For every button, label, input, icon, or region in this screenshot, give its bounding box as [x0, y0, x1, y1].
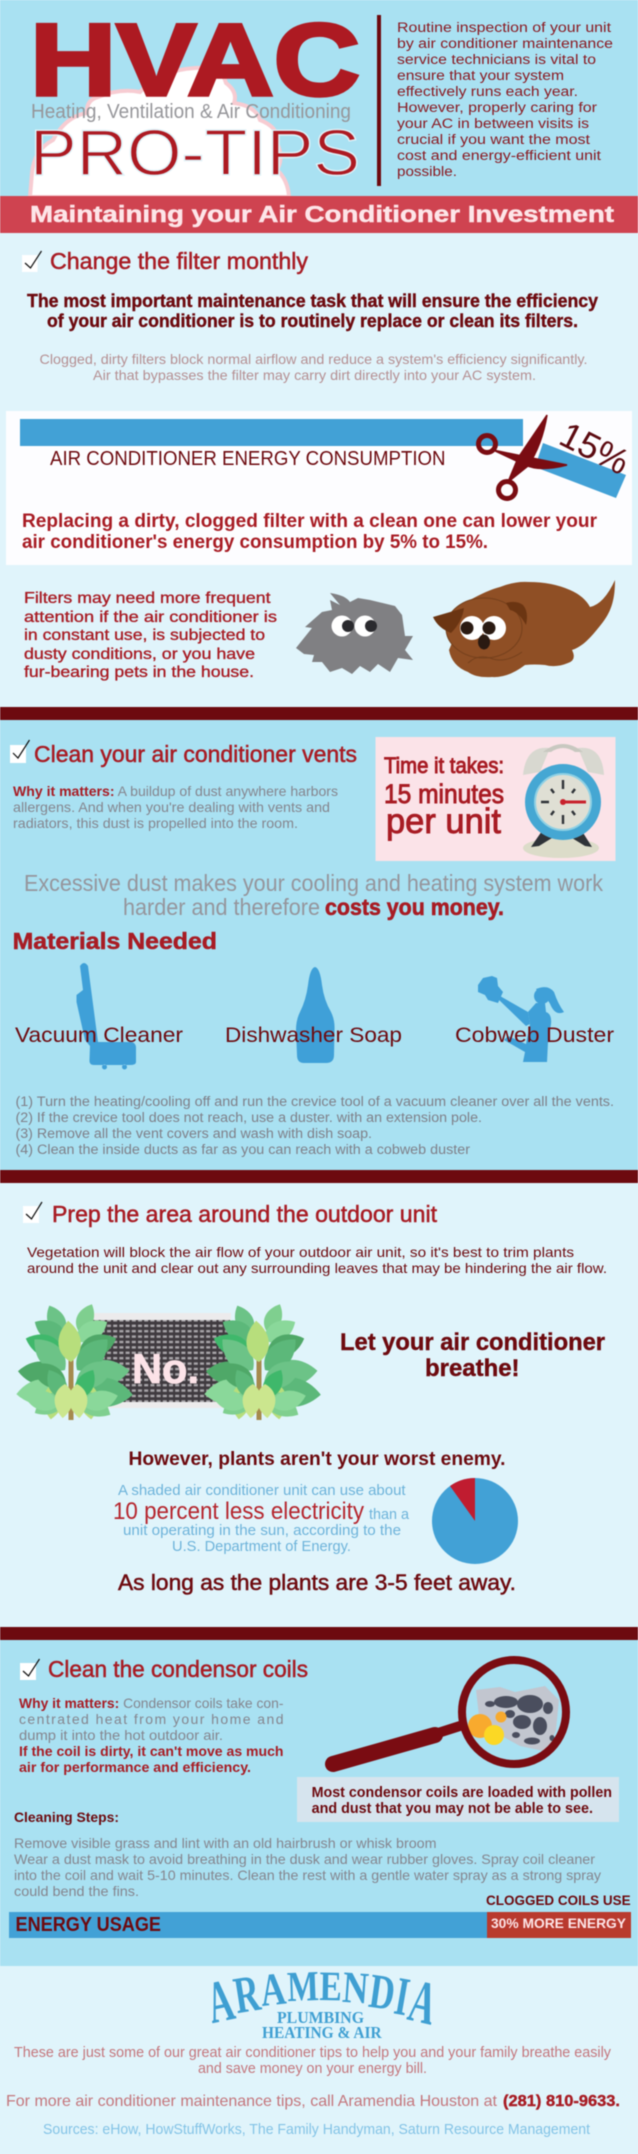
heading: Clean your air conditioner vents — [34, 741, 357, 767]
shade statistic: than a — [369, 1506, 410, 1523]
why it matters: air for performance and efficiency. — [19, 1759, 251, 1775]
energy usage bar — [9, 1912, 631, 1938]
closing text — [14, 2045, 612, 2077]
why it matters: Why it matters: Condensor coils take con- — [19, 1695, 284, 1711]
pollen callout: and dust that you may not be able to see. — [312, 1801, 593, 1817]
pets text: attention if the air conditioner is — [24, 609, 277, 626]
divider bar — [377, 15, 381, 186]
icon: vacuum cleaner — [76, 963, 136, 1070]
logo: Aramendia: I — [390, 1966, 414, 2027]
energy usage bar: ENERGY USAGE — [16, 1914, 161, 1936]
logo: Aramendia: HEATING & AIR — [262, 2023, 382, 2042]
intro paragraph — [397, 20, 613, 179]
intro paragraph: cost and energy-efficient unit — [397, 148, 601, 163]
vegetation text: Vegetation will block the air flow of your outdoor air unit, so it's best to trim plants — [27, 1244, 574, 1260]
pollen callout — [297, 1777, 619, 1822]
logo: Aramendia: A — [258, 1963, 288, 2016]
why it matters: If the coil is dirty, it can't move as much — [19, 1743, 284, 1759]
enemy heading: However, plants aren't your worst enemy. — [128, 1449, 505, 1470]
pollen callout: Most condensor coils are loaded with pollen — [312, 1785, 612, 1801]
sources: Sources: eHow, HowStuffWorks, The Family Handyman, Saturn Resource Management — [43, 2121, 591, 2138]
header — [30, 3, 613, 197]
subtitle: Heating, Ventilation & Air Conditioning — [31, 101, 351, 123]
dust message: Excessive dust makes your cooling and heating system work — [24, 870, 603, 896]
why it matters: allergens. And when you're dealing with vents and — [13, 799, 330, 815]
steps list — [16, 1094, 614, 1157]
call to action: (281) 810-9633. — [503, 2093, 620, 2110]
icon: checkbox — [23, 1202, 42, 1223]
logo: Aramendia: A — [201, 1965, 240, 2036]
material labels: Dishwasher Soap — [225, 1024, 402, 1047]
vegetation text: around the unit and clear out any surrounding leaves that may be hindering the air flow. — [27, 1260, 607, 1276]
plants distance: As long as the plants are 3-5 feet away. — [118, 1570, 516, 1595]
panel: outdoor unit — [15, 1201, 607, 1595]
cleaning steps heading: Cleaning Steps: — [14, 1809, 119, 1825]
logo: Aramendia: R — [230, 1964, 265, 2025]
banner: Maintaining your Air Conditioner Investment — [30, 201, 614, 227]
panel: change the filter — [6, 248, 636, 681]
materials heading: Materials Needed — [13, 928, 217, 954]
material labels: Cobweb Duster — [455, 1024, 614, 1047]
logo: Aramendia: N — [341, 1962, 370, 2014]
icon: checkbox — [10, 740, 30, 763]
panel: time it takes: per unit — [386, 802, 501, 841]
intro paragraph: effectively runs each year. — [397, 84, 578, 99]
intro paragraph: possible. — [397, 164, 457, 179]
cleaning steps text: Wear a dust mask to avoid breathing in the dusk and wear rubber gloves. Spray coil cleaner — [14, 1851, 595, 1867]
material labels — [15, 1024, 614, 1047]
intro paragraph: ensure that your system — [397, 68, 564, 83]
pets text: in constant use, is subjected to — [24, 627, 265, 644]
cleaning steps text: Remove visible grass and lint with an old hairbrush or whisk broom — [14, 1835, 436, 1851]
icon: soap bottle — [296, 967, 335, 1063]
panel: time it takes: Time it takes: — [384, 753, 504, 778]
energy label: CLOGGED COILS USE — [486, 1892, 631, 1908]
shade statistic: U.S. Department of Energy. — [172, 1538, 351, 1555]
panel: time it takes: 15 minutes — [384, 779, 504, 809]
steps list: (2) If the crevice tool does not reach, use a duster. with an extension pole. — [16, 1110, 482, 1125]
logo: Aramendia: PLUMBING — [277, 2008, 364, 2027]
heading: Prep the area around the outdoor unit — [52, 1201, 438, 1227]
why it matters — [13, 783, 338, 831]
breathe message: breathe! — [425, 1355, 520, 1382]
shade statistic — [113, 1482, 410, 1555]
pie chart — [432, 1478, 518, 1564]
icon: magnifying glass — [333, 1660, 566, 1764]
shade statistic: 10 percent less electricity — [113, 1498, 364, 1525]
bar cut piece — [535, 443, 626, 498]
logo: Aramendia: E — [319, 1964, 342, 2010]
icon: duster woman — [478, 976, 564, 1062]
footer — [6, 1962, 620, 2138]
panel: clean vents — [10, 737, 616, 1157]
why it matters — [19, 1695, 284, 1775]
panel: time it takes — [376, 737, 616, 861]
pets text — [24, 590, 277, 681]
logo: Aramendia: D — [366, 1964, 398, 2021]
explanatory text: Clogged, dirty filters block normal airflow and reduce a system's efficiency significantly. — [40, 351, 588, 367]
call to action: For more air conditioner maintenance tips, call Aramendia Houston at — [6, 2093, 498, 2110]
steps list: (3) Remove all the vent covers and wash with dish soap. — [16, 1126, 372, 1141]
steps list: (4) Clean the inside ducts as far as you can reach with a cobweb duster — [16, 1142, 471, 1157]
bar label: AIR CONDITIONER ENERGY CONSUMPTION — [50, 448, 446, 470]
panel: energy consumption — [6, 411, 636, 565]
logo: Aramendia: A — [403, 1967, 443, 2038]
icon: scissors — [478, 415, 567, 498]
illustration: plants blocking unit: No. — [132, 1345, 199, 1392]
shade statistic: unit operating in the sun, according to the — [123, 1522, 401, 1539]
bar — [20, 419, 523, 446]
cleaning steps text: into the coil and wait 5-10 minutes. Clean the rest with a gentle water spray as a strong spray — [14, 1867, 601, 1883]
intro paragraph: crucial if you want the most — [397, 132, 590, 147]
key message: The most important maintenance task that will ensure the efficiency — [27, 291, 598, 311]
intro paragraph: However, properly caring for — [397, 100, 598, 115]
why it matters: centrated heat from your home and — [19, 1711, 284, 1727]
dust message: harder and therefore — [123, 894, 320, 920]
why it matters: dump it into the hot outdoor air. — [19, 1727, 223, 1743]
icon: checkbox — [20, 1659, 40, 1680]
cleaning steps text — [14, 1835, 601, 1899]
dust message: costs you money. — [325, 894, 504, 920]
icon: cloud — [30, 68, 289, 197]
icon: checkbox — [22, 251, 42, 272]
illustration: plants blocking unit — [15, 1301, 322, 1424]
steps list: (1) Turn the heating/cooling off and run the crevice tool of a vacuum cleaner over all the vents. — [16, 1094, 614, 1109]
shade statistic: A shaded air conditioner unit can use about — [118, 1482, 406, 1499]
intro paragraph: your AC in between visits is — [397, 116, 589, 131]
title: HVAC: HVAC — [30, 3, 360, 117]
cleaning steps text: could bend the fins. — [14, 1883, 139, 1899]
why it matters: radiators, this dust is propelled into the room. — [13, 815, 298, 831]
intro paragraph: Routine inspection of your unit — [397, 20, 611, 35]
icon: dog — [433, 580, 615, 677]
breathe message — [340, 1329, 605, 1382]
heading: Clean the condensor coils — [48, 1656, 308, 1682]
dust message — [24, 870, 603, 920]
closing text: and save money on your energy bill. — [198, 2061, 427, 2077]
logo: Aramendia: M — [286, 1963, 320, 2011]
explanatory text: Air that bypasses the filter may carry dirt directly into your AC system. — [93, 367, 536, 383]
key message — [27, 291, 598, 331]
intro paragraph: service technicians is vital to — [397, 52, 596, 67]
panel: condensor coils — [9, 1656, 631, 1938]
material labels: Vacuum Cleaner — [15, 1024, 183, 1047]
savings statement: Replacing a dirty, clogged filter with a clean one can lower your — [22, 511, 598, 532]
pets text: Filters may need more frequent — [24, 590, 271, 607]
closing text: These are just some of our great air conditioner tips to help you and your family breathe easily — [14, 2045, 612, 2061]
breathe message: Let your air conditioner — [340, 1329, 605, 1356]
banner — [0, 196, 638, 233]
intro paragraph: by air conditioner maintenance — [397, 36, 613, 51]
15 percent: 15% — [553, 414, 636, 483]
savings statement: air conditioner's energy consumption by 5% to 15%. — [22, 532, 488, 553]
icon: alarm clock — [523, 744, 604, 858]
explanatory text — [40, 351, 588, 383]
icon: dust bunny — [296, 593, 413, 674]
vegetation text — [27, 1244, 607, 1276]
pets text: dusty conditions, or you have — [24, 646, 255, 663]
title: pro-tips: PRO-TIPS — [30, 116, 360, 189]
why it matters: Why it matters: A buildup of dust anywhere harbors — [13, 783, 338, 799]
key message: of your air conditioner is to routinely replace or clean its filters. — [47, 311, 578, 331]
energy usage bar: 30% MORE ENERGY — [491, 1915, 627, 1931]
pets text: fur-bearing pets in the house. — [24, 664, 254, 681]
savings statement — [22, 511, 598, 553]
logo: Aramendia — [201, 1962, 443, 2042]
heading: Change the filter monthly — [50, 248, 308, 274]
